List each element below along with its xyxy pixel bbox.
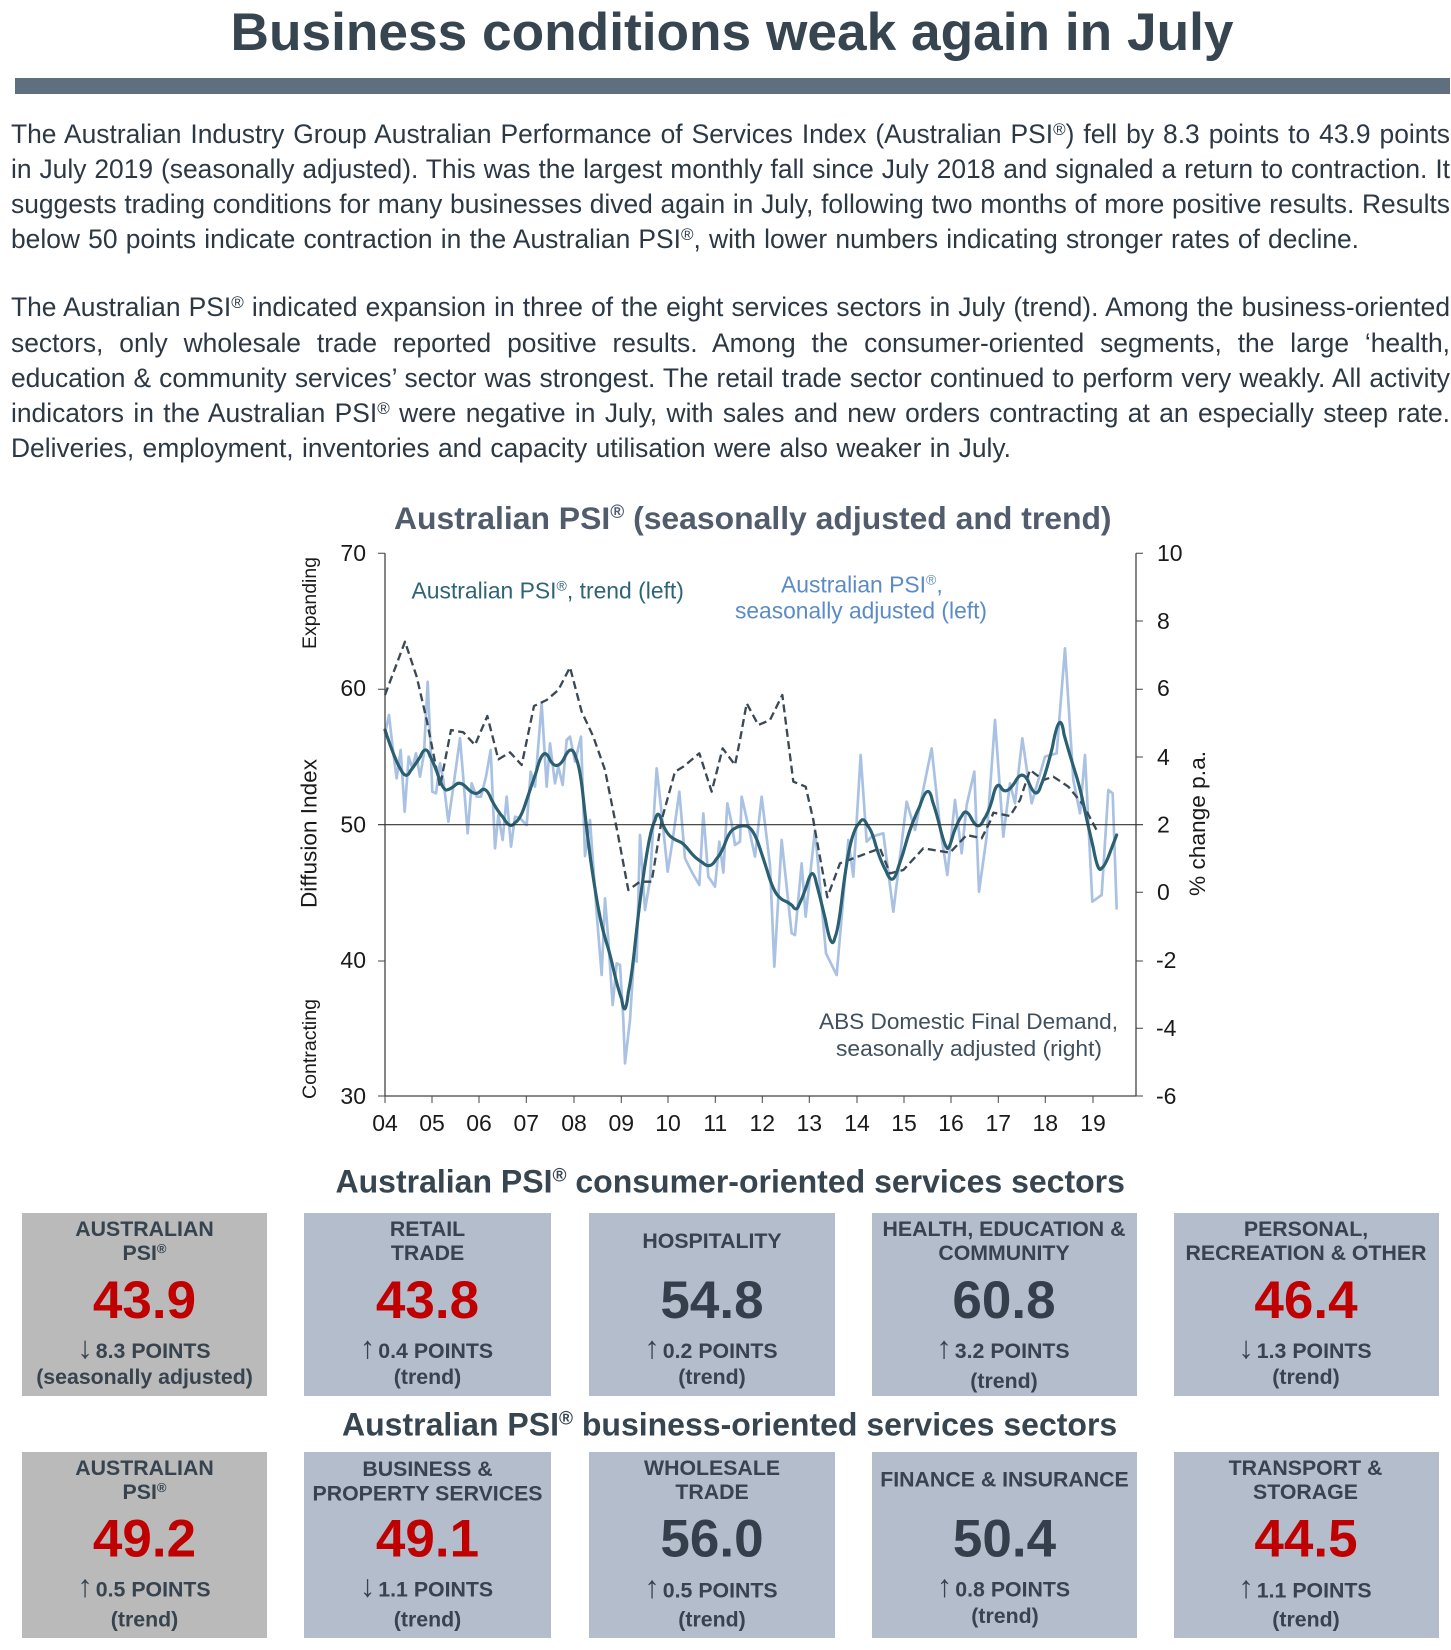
x axis year labels: 17 bbox=[986, 1110, 1011, 1136]
x axis year labels: 19 bbox=[1080, 1110, 1106, 1136]
series label: seasonally adjusted bbox=[735, 572, 987, 624]
series label: seasonally adjusted: Australian PSI bbox=[781, 572, 926, 598]
card: transport and storage: 44.5 bbox=[1254, 1510, 1358, 1568]
left axis labels: 30 bbox=[340, 1083, 366, 1109]
right axis labels: 10 bbox=[1157, 540, 1183, 566]
card: finance and insurance: ↑ 0.8 POINTS bbox=[937, 1568, 1070, 1604]
card: business and property services: ↓ 1.1 POINTS bbox=[360, 1568, 493, 1604]
card: Australian PSI trend: 49.2 bbox=[93, 1510, 196, 1568]
title: Business conditions weak again in July bbox=[230, 3, 1234, 62]
right axis labels: -4 bbox=[1156, 1015, 1177, 1041]
text block: first paragraph: The Australian Industry Group Australian Performance of Services Index (Australian PSI®) fell by 8.3 points to 43.9 points bbox=[11, 119, 1450, 149]
axes and ticks bbox=[378, 553, 1143, 1103]
series label: trend: Australian PSI bbox=[412, 578, 557, 604]
card: health, education and community: COMMUNITY bbox=[938, 1241, 1070, 1265]
section heading: business-oriented: Australian PSI bbox=[342, 1406, 559, 1442]
text block: second paragraph: The Australian PSI® indicated expansion in three of the eight services sectors in July (trend). Among the business-oriented bbox=[11, 292, 1450, 322]
card: finance and insurance: FINANCE & INSURANCE bbox=[880, 1468, 1129, 1492]
card: wholesale trade: (trend) bbox=[678, 1608, 746, 1632]
card: hospitality: 54.8 bbox=[660, 1271, 764, 1330]
card: Australian PSI seasonally adjusted: 43.9 bbox=[93, 1271, 196, 1330]
series label: seasonally adjusted: , bbox=[936, 572, 943, 598]
text block: first paragraph bbox=[11, 119, 1450, 254]
x axis year labels: 14 bbox=[844, 1110, 870, 1136]
left axis labels: 40 bbox=[340, 947, 366, 973]
section heading: consumer-oriented: ® bbox=[552, 1166, 566, 1186]
card: retail trade: 43.8 bbox=[376, 1271, 479, 1330]
card: Australian PSI trend: PSI bbox=[123, 1480, 157, 1504]
right axis labels bbox=[1156, 540, 1183, 1109]
series label: seasonally adjusted: seasonally adjusted (left) bbox=[735, 598, 987, 624]
x axis year labels: 10 bbox=[655, 1110, 681, 1136]
card: transport and storage: TRANSPORT & bbox=[1229, 1456, 1382, 1480]
text block: second paragraph: Deliveries, employment, inventories and capacity utilisation were also weaker in July. bbox=[11, 433, 1011, 463]
section heading: business-oriented: ® bbox=[559, 1408, 573, 1430]
card: transport and storage: ↑ 1.1 POINTS bbox=[1238, 1570, 1372, 1604]
card: wholesale trade: TRADE bbox=[675, 1480, 749, 1504]
chart heading: ® bbox=[610, 502, 624, 523]
text block: second paragraph bbox=[11, 292, 1450, 463]
card: business and property services: PROPERTY SERVICES bbox=[312, 1482, 543, 1506]
title rule bbox=[15, 78, 1450, 94]
x axis year labels: 06 bbox=[466, 1110, 492, 1136]
card: health, education and community: HEALTH, EDUCATION & bbox=[883, 1217, 1125, 1241]
x axis year labels bbox=[372, 1110, 1106, 1136]
card: personal, recreation and other: RECREATION & OTHER bbox=[1186, 1241, 1426, 1265]
chart: Australian PSI seasonally adjusted and trend bbox=[296, 500, 1210, 1136]
card: personal, recreation and other: PERSONAL, bbox=[1244, 1217, 1368, 1241]
series label: ABS domestic final demand: seasonally adjusted (right) bbox=[836, 1036, 1102, 1061]
card: health, education and community: 60.8 bbox=[952, 1271, 1056, 1330]
x axis year labels: 05 bbox=[419, 1110, 445, 1136]
text block: first paragraph: below 50 points indicate contraction in the Australian PSI®, with lower numbers indicating stronger rates of decline. bbox=[11, 224, 1359, 254]
x axis year labels: 18 bbox=[1033, 1110, 1058, 1136]
card: retail trade: (trend) bbox=[394, 1365, 461, 1389]
card: health, education and community bbox=[872, 1213, 1137, 1396]
card: transport and storage bbox=[1174, 1452, 1439, 1638]
card: business and property services: BUSINESS & bbox=[362, 1457, 493, 1481]
card: retail trade: ↑ 0.4 POINTS bbox=[360, 1330, 493, 1365]
card: retail trade: TRADE bbox=[391, 1241, 464, 1265]
x axis year labels: 16 bbox=[938, 1110, 964, 1136]
card: personal, recreation and other: ↓ 1.3 POINTS bbox=[1238, 1330, 1372, 1365]
right axis labels: 0 bbox=[1157, 879, 1170, 905]
right axis labels: 8 bbox=[1157, 608, 1170, 634]
left axis labels: 60 bbox=[340, 675, 366, 701]
card: business and property services: (trend) bbox=[394, 1608, 461, 1632]
x axis year labels: 07 bbox=[514, 1110, 539, 1136]
x axis year labels: 08 bbox=[561, 1110, 587, 1136]
card: Australian PSI trend bbox=[22, 1452, 267, 1638]
card: transport and storage: (trend) bbox=[1272, 1608, 1340, 1632]
card: wholesale trade: ↑ 0.5 POINTS bbox=[644, 1570, 778, 1604]
card: hospitality bbox=[589, 1213, 835, 1396]
card: finance and insurance: (trend) bbox=[971, 1604, 1039, 1628]
x axis year labels: 12 bbox=[750, 1110, 775, 1136]
series label: trend: , trend (left) bbox=[567, 578, 684, 604]
line: trend series bbox=[385, 722, 1117, 1009]
card: Australian PSI trend: ® bbox=[157, 1480, 167, 1495]
card: wholesale trade: WHOLESALE bbox=[644, 1456, 780, 1480]
card: personal, recreation and other bbox=[1174, 1213, 1439, 1396]
line: ABS domestic final demand (dashed) bbox=[385, 642, 1098, 897]
right axis labels: 4 bbox=[1157, 744, 1170, 770]
text block: first paragraph: suggests trading conditions for many businesses dived again in July, following two months of more positive results. Results bbox=[11, 189, 1450, 219]
line: seasonally adjusted series bbox=[385, 648, 1117, 1063]
rotated axis titles: % change p.a. bbox=[1185, 751, 1210, 896]
card: business and property services bbox=[304, 1452, 551, 1638]
section heading: business-oriented: business-oriented services sectors bbox=[573, 1406, 1117, 1442]
card: Australian PSI trend: ↑ 0.5 POINTS bbox=[77, 1568, 211, 1604]
x axis year labels: 04 bbox=[372, 1110, 398, 1136]
section heading: consumer-oriented: Australian PSI bbox=[336, 1164, 552, 1200]
card: business and property services: 49.1 bbox=[376, 1510, 479, 1568]
x axis year labels: 09 bbox=[609, 1110, 634, 1136]
card: wholesale trade: 56.0 bbox=[660, 1510, 764, 1568]
right axis labels: 6 bbox=[1157, 675, 1170, 701]
card: finance and insurance: 50.4 bbox=[953, 1510, 1057, 1568]
rotated axis titles: Contracting bbox=[299, 999, 321, 1099]
card: health, education and community: ↑ 3.2 POINTS bbox=[936, 1330, 1070, 1365]
card: Australian PSI seasonally adjusted: (seasonally adjusted) bbox=[36, 1365, 253, 1389]
x axis year labels: 11 bbox=[703, 1110, 727, 1136]
card: wholesale trade bbox=[589, 1452, 835, 1638]
right axis labels: 2 bbox=[1157, 812, 1170, 838]
right axis labels: -2 bbox=[1156, 947, 1176, 973]
series label: trend: ® bbox=[557, 578, 568, 594]
text block: second paragraph: education & community services’ sector was strongest. The retail trade sector continued to perform very weakly. All activity bbox=[11, 362, 1450, 392]
card: Australian PSI seasonally adjusted: PSI bbox=[123, 1241, 157, 1265]
left axis labels bbox=[340, 540, 366, 1109]
series label: seasonally adjusted: ® bbox=[926, 572, 937, 588]
card: transport and storage: STORAGE bbox=[1253, 1480, 1358, 1504]
text block: second paragraph: sectors, only wholesale trade reported positive results. Among the consumer-oriented segments, the large ‘health, bbox=[11, 328, 1450, 358]
rotated axis titles: Expanding bbox=[299, 557, 321, 649]
x axis year labels: 13 bbox=[797, 1110, 822, 1136]
section heading: consumer-oriented: consumer-oriented services sectors bbox=[566, 1164, 1125, 1200]
text block: second paragraph: indicators in the Australian PSI® were negative in July, with sales and new orders contracting at an especially steep rate. bbox=[11, 398, 1450, 428]
card: Australian PSI trend: AUSTRALIAN bbox=[75, 1456, 214, 1480]
card: Australian PSI seasonally adjusted: AUSTRALIAN bbox=[75, 1217, 214, 1241]
card: hospitality: ↑ 0.2 POINTS bbox=[644, 1330, 778, 1365]
card: hospitality: HOSPITALITY bbox=[642, 1229, 782, 1253]
rotated axis titles: Diffusion Index bbox=[296, 759, 322, 908]
chart heading: (seasonally adjusted and trend) bbox=[624, 500, 1112, 536]
card: Australian PSI seasonally adjusted bbox=[22, 1213, 267, 1396]
chart heading: Australian PSI bbox=[394, 500, 610, 536]
rotated axis titles bbox=[296, 557, 1210, 1099]
series label: ABS domestic final demand: ABS Domestic Final Demand, bbox=[819, 1009, 1118, 1034]
card: personal, recreation and other: 46.4 bbox=[1254, 1271, 1358, 1330]
card: retail trade bbox=[304, 1213, 551, 1396]
left axis labels: 50 bbox=[340, 812, 366, 838]
card: Australian PSI seasonally adjusted: ↓ 8.3 POINTS bbox=[77, 1330, 211, 1365]
card: finance and insurance bbox=[872, 1452, 1137, 1638]
card: hospitality: (trend) bbox=[678, 1365, 746, 1389]
series label: ABS domestic final demand bbox=[819, 1009, 1118, 1061]
card: health, education and community: (trend) bbox=[970, 1369, 1038, 1393]
left axis labels: 70 bbox=[340, 540, 366, 566]
card: retail trade: RETAIL bbox=[390, 1217, 465, 1241]
card: Australian PSI trend: (trend) bbox=[111, 1608, 178, 1632]
text block: first paragraph: in July 2019 (seasonally adjusted). This was the largest monthly fall since July 2018 and signaled a return to contraction. It bbox=[11, 154, 1450, 184]
x axis year labels: 15 bbox=[891, 1110, 917, 1136]
card: personal, recreation and other: (trend) bbox=[1272, 1365, 1340, 1389]
right axis labels: -6 bbox=[1156, 1083, 1176, 1109]
card: Australian PSI seasonally adjusted: ® bbox=[157, 1241, 167, 1256]
